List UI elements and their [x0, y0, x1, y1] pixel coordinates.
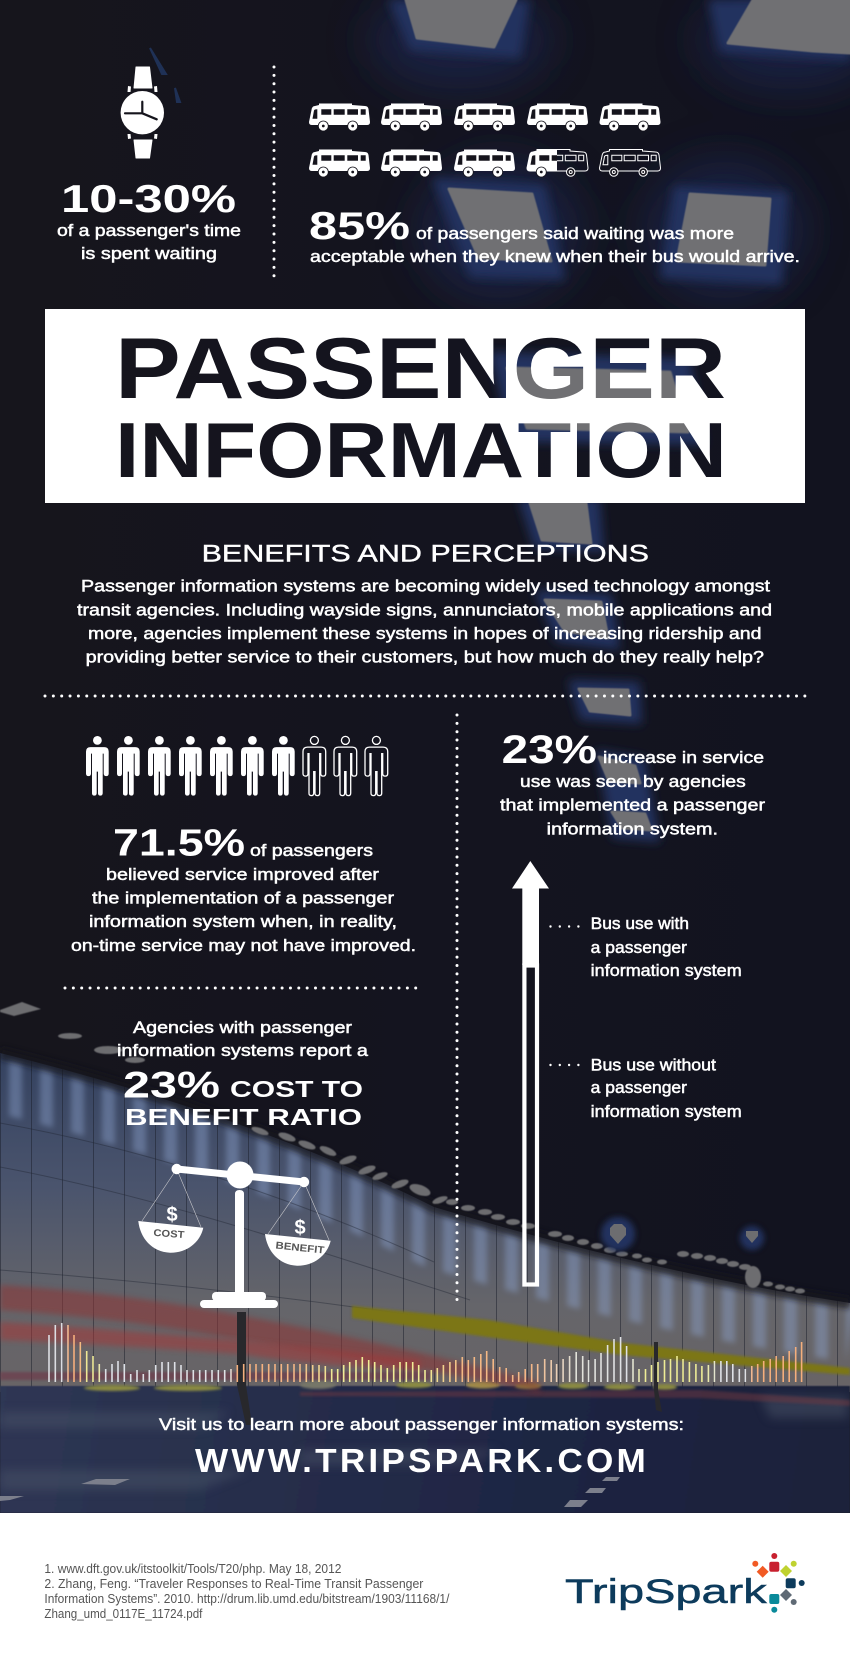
label: bus use with system: a passenger: [591, 939, 688, 957]
intro paragraph: Passenger information systems are becoming widely used technology amongst: [81, 578, 770, 596]
bus stat panel: [309, 104, 800, 266]
icon row: people 71.5 percent: [86, 736, 388, 796]
text: waiting was more acceptable: [310, 225, 800, 266]
tunnel signs: [601, 1217, 764, 1251]
text: of a passenger's time is spent waiting: [57, 222, 241, 263]
footnotes: 2. Zhang, Feng. “Traveler Responses to Real-Time Transit Passenger: [44, 1577, 423, 1591]
text: increase in service use: that implemented a passenger: [500, 797, 766, 815]
text: increase in service use: use was seen by agencies: [520, 773, 746, 791]
text: of a passenger's time is spent waiting: is spent waiting: [81, 245, 217, 263]
stat: 71.5%: 71.5%: [113, 822, 245, 864]
label: bus use without system: Bus use without: [591, 1056, 716, 1074]
stat: 23% cost to benefit ratio: BENEFIT RATIO: [125, 1104, 362, 1130]
watch stat panel: [57, 67, 241, 263]
intro paragraph: providing better service to their customers, but how much do they really help?: [86, 649, 764, 667]
left pan: $: [166, 1204, 178, 1226]
text: waiting was more acceptable: of passengers said waiting was more: [416, 225, 734, 243]
stat: 10-30%: 10-30%: [61, 178, 236, 221]
text: perception of improvement: [71, 842, 416, 955]
text: perception of improvement: on-time service may not have improved.: [71, 937, 416, 955]
left pan: COST: [153, 1228, 185, 1241]
left panel: cost to benefit: [117, 1019, 369, 1308]
label: bus use without system: a passenger: [591, 1079, 688, 1097]
footer panel: [0, 1513, 850, 1667]
logo: TripSpark: [565, 1553, 805, 1613]
text: perception of improvement: the implementation of a passenger: [92, 890, 395, 908]
light trails: [0, 1285, 850, 1392]
road: [0, 1381, 850, 1513]
title: PASSENGER: [115, 321, 726, 417]
text: increase in service use: information system.: [547, 820, 718, 838]
tunnel pillars: [237, 1312, 662, 1425]
intro paragraph: more, agencies implement these systems in hopes of increasing ridership and: [88, 625, 761, 643]
chart: audio-style bar spectrum: [49, 1323, 802, 1382]
left pan: [138, 1204, 203, 1253]
right pan: $: [294, 1217, 306, 1239]
heading: benefits and perceptions: BENEFITS AND PERCEPTIONS: [202, 541, 649, 568]
right pan: BENEFIT: [275, 1240, 325, 1257]
logo: TripSpark: TripSpark: [565, 1573, 768, 1611]
right pan: [265, 1217, 331, 1266]
footnotes: Information Systems”. 2010. http://drum.lib.umd.edu/bitstream/1903/11168/1/: [44, 1592, 450, 1606]
stat: 23%: 23%: [502, 728, 597, 772]
tunnel wall: [0, 1053, 850, 1392]
label: bus use with system: [550, 915, 742, 980]
text: agencies report: Agencies with passenger: [133, 1019, 353, 1037]
text: increase in service use: [500, 749, 766, 838]
footnotes: Zhang_umd_0117E_11724.pdf: [44, 1607, 203, 1621]
text: waiting was more acceptable: acceptable when they knew when their bus would arrive.: [310, 248, 800, 266]
title: [115, 321, 727, 494]
text: perception of improvement: believed service improved after: [106, 866, 380, 884]
stat: 23% cost to benefit ratio: [123, 1064, 363, 1130]
label: bus use with system: Bus use with: [591, 915, 689, 933]
ceiling light row: [0, 1002, 805, 1294]
title banner: [45, 309, 805, 503]
footnotes: 1. www.dft.gov.uk/itstoolkit/Tools/T20/php. May 18, 2012: [44, 1562, 341, 1576]
text: agencies report: [117, 1019, 369, 1060]
intro paragraph: transit agencies. Including wayside signs, annunciators, mobile applications and: [77, 602, 772, 620]
left panel: perception stat: [71, 736, 416, 955]
stat: 85%: 85%: [309, 205, 410, 248]
call to action: [159, 1416, 684, 1479]
icon row: buses 85 percent: [309, 104, 660, 177]
website url: WWW.TRIPSPARK.COM: [195, 1442, 649, 1479]
stat: 23% cost to benefit ratio: COST TO: [230, 1076, 363, 1102]
text: agencies report: information systems report a: [117, 1042, 369, 1060]
icon: wristwatch: [121, 67, 164, 158]
footnotes: [44, 1562, 450, 1621]
text: perception of improvement: information system when, in reality,: [89, 913, 397, 931]
label: bus use without system: information system: [591, 1103, 742, 1121]
text: perception of improvement: of passengers: [250, 842, 373, 860]
title: INFORMATION: [115, 406, 727, 494]
right panel: service use: [500, 728, 766, 1284]
icon: balance scale: [138, 1162, 331, 1308]
stat: 23% cost to benefit ratio: 23%: [123, 1064, 220, 1105]
label: bus use without system: [550, 1056, 742, 1121]
intro paragraph: [77, 578, 772, 667]
label: bus use with system: information system: [591, 962, 742, 980]
text: of a passenger's time is spent waiting: of a passenger's time: [57, 222, 241, 240]
arrow: bus use increase: [512, 861, 549, 1284]
text: increase in service use: increase in service: [603, 749, 764, 767]
call to action: Visit us to learn more about passenger information systems:: [159, 1416, 684, 1434]
